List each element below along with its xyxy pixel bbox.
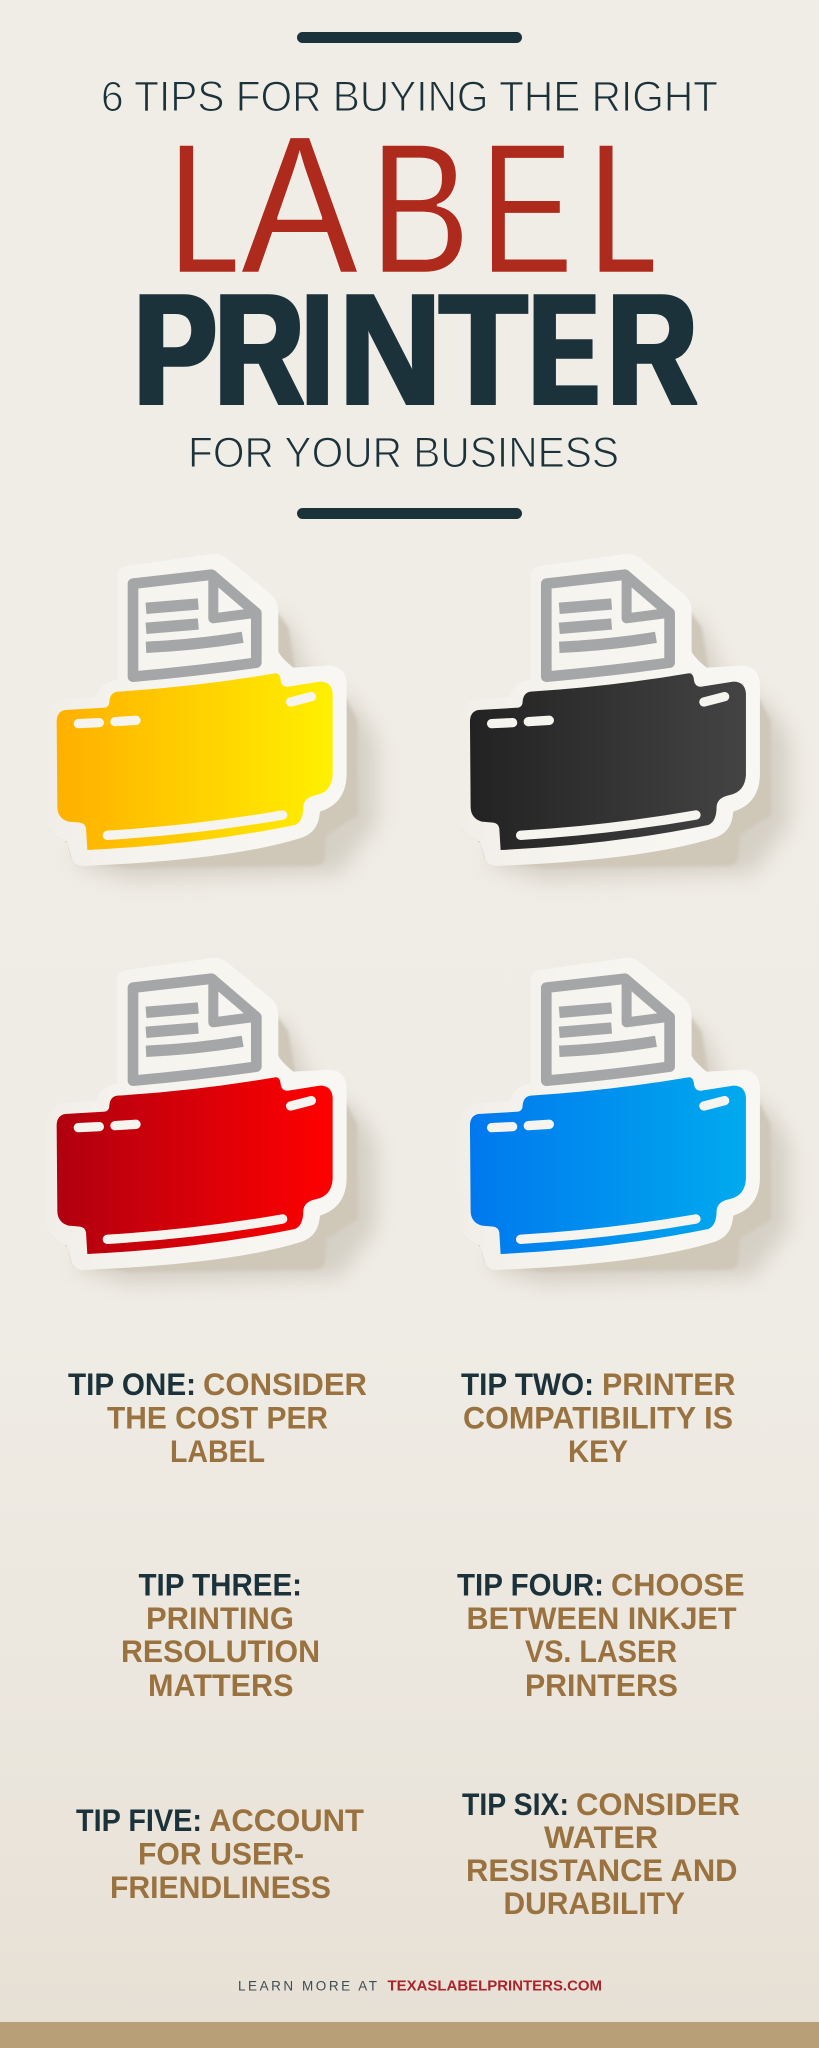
tip five: TIP FIVE: <box>76 1802 202 1838</box>
tip six: TIP SIX: <box>462 1786 569 1822</box>
heading word: LABEL: A <box>241 95 359 315</box>
tip two: PRINTER <box>602 1366 736 1402</box>
tip six <box>462 1786 740 1921</box>
icon: red printer sticker <box>47 958 377 1284</box>
icon: blue printer sticker <box>460 958 790 1284</box>
tip two: KEY <box>568 1433 628 1469</box>
tip one <box>68 1366 367 1469</box>
tip three: PRINTING <box>146 1600 294 1636</box>
heading line: 6 tips for buying the right: 6 TIPS FOR BUYING THE RIGHT <box>101 73 718 121</box>
tip four: CHOOSE <box>611 1566 744 1602</box>
heading word: LABEL <box>171 95 656 315</box>
footer call to action: TEXASLABELPRINTERS.COM <box>388 1978 602 1994</box>
heading word: PRINTER: T <box>439 262 528 438</box>
title block <box>101 73 718 477</box>
tip four: BETWEEN INKJET <box>466 1600 736 1636</box>
tip five: FRIENDLINESS <box>110 1869 331 1905</box>
tip five <box>76 1802 364 1905</box>
tip one: LABEL <box>170 1433 265 1469</box>
tip four: PRINTERS <box>525 1667 678 1703</box>
tip one: TIP ONE: <box>68 1366 196 1402</box>
tip three: RESOLUTION <box>121 1633 320 1669</box>
tip one: CONSIDER <box>203 1366 367 1402</box>
bottom tan band <box>0 2022 819 2048</box>
heading word: LABEL: B <box>370 106 470 313</box>
heading word: LABEL: L <box>171 106 238 313</box>
tip six: DURABILITY <box>504 1885 685 1921</box>
tip two: COMPATIBILITY IS <box>463 1400 733 1436</box>
heading word: PRINTER: E <box>531 262 597 438</box>
tip three: TIP THREE: <box>138 1566 302 1602</box>
tip two <box>461 1366 736 1469</box>
tip six: CONSIDER <box>576 1786 740 1822</box>
heading word: PRINTER: P <box>134 262 216 438</box>
tip four: TIP FOUR: <box>457 1566 604 1602</box>
heading line: for your business: FOR YOUR BUSINESS <box>188 429 619 477</box>
tip three: MATTERS <box>148 1667 294 1703</box>
tip five: ACCOUNT <box>209 1802 364 1838</box>
heading word: PRINTER: R <box>608 262 697 438</box>
heading word: PRINTER: I <box>303 262 332 438</box>
top divider bar <box>297 32 522 43</box>
tip two: TIP TWO: <box>461 1366 594 1402</box>
tip three <box>121 1566 320 1703</box>
heading word: LABEL: L <box>591 106 656 313</box>
bottom divider bar <box>297 508 522 519</box>
icon: yellow printer sticker <box>47 554 377 880</box>
footer call to action <box>238 1978 602 1994</box>
tip four: VS. LASER <box>525 1633 677 1669</box>
footer call to action: LEARN MORE AT <box>238 1978 377 1994</box>
heading word: PRINTER <box>134 262 697 438</box>
heading word: LABEL: E <box>481 106 572 313</box>
tip four <box>457 1566 744 1703</box>
heading word: PRINTER: N <box>339 262 442 438</box>
heading word: PRINTER: R <box>215 262 304 438</box>
tip six: WATER <box>544 1819 658 1855</box>
tip five: FOR USER- <box>138 1836 304 1872</box>
icon: black printer sticker <box>460 554 790 880</box>
tip six: RESISTANCE AND <box>466 1852 738 1888</box>
tip one: THE COST PER <box>107 1400 328 1436</box>
